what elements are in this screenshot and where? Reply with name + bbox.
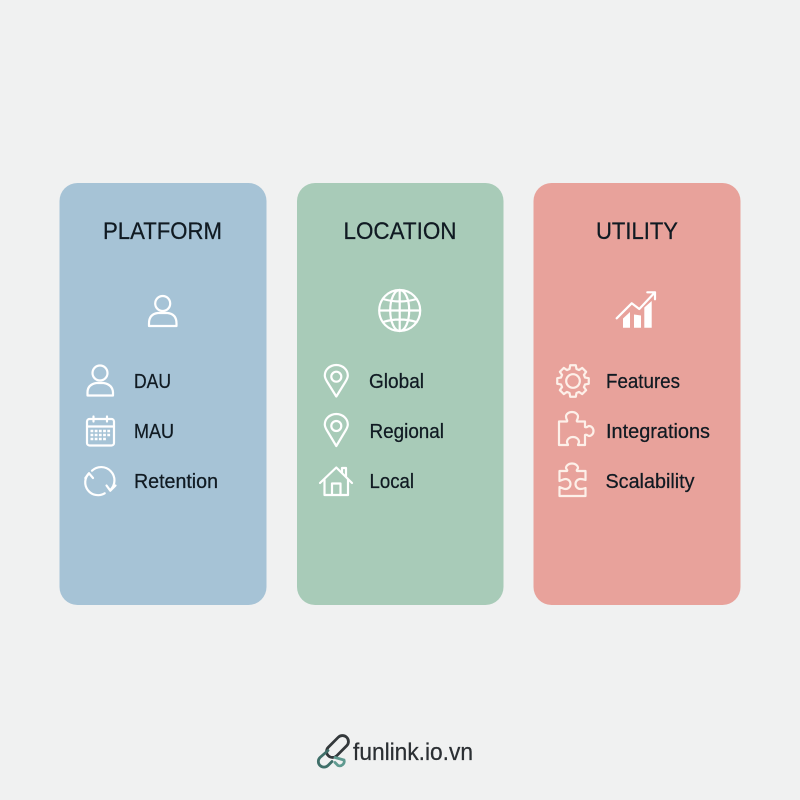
icon: refresh arrows — [85, 467, 116, 495]
item: Scalability — [560, 464, 694, 496]
footer brand — [318, 733, 473, 767]
label: MAU: MAU — [134, 421, 174, 443]
icon: gear — [557, 365, 589, 397]
panel: utility — [534, 183, 740, 605]
icon: calendar — [87, 416, 114, 446]
item: MAU — [87, 416, 174, 446]
label: Local: Local — [370, 471, 414, 493]
label: Scalability: Scalability — [606, 471, 694, 493]
item: Features — [557, 365, 680, 397]
label: Global: Global — [369, 371, 424, 393]
heading: location: LOCATION — [344, 218, 456, 245]
label: Regional: Regional — [370, 421, 444, 443]
icon: growth chart — [617, 292, 655, 328]
icon: map pin — [325, 414, 348, 446]
item: Retention — [85, 467, 218, 495]
panel: platform — [60, 183, 266, 605]
icon: puzzle piece — [560, 464, 586, 496]
heading: utility: UTILITY — [596, 218, 678, 245]
item: Global — [325, 365, 424, 396]
icon: platform user — [149, 296, 176, 326]
item: Integrations — [559, 412, 710, 445]
brand name: funlink.io.vn — [353, 739, 473, 766]
label: Retention: Retention — [134, 471, 218, 493]
label: Features: Features — [606, 371, 680, 393]
heading: platform: PLATFORM — [103, 218, 222, 245]
icon: globe — [379, 290, 420, 331]
label: DAU: DAU — [134, 371, 171, 393]
item: DAU — [88, 366, 171, 396]
icon: chain link — [318, 733, 351, 767]
panel: location — [297, 183, 504, 605]
icon: house — [320, 468, 352, 495]
label: Integrations: Integrations — [606, 421, 710, 443]
icon: map pin — [325, 365, 348, 396]
icon: puzzle piece — [559, 412, 594, 445]
item: Regional — [325, 414, 444, 446]
icon: user — [88, 366, 113, 396]
item: Local — [320, 468, 414, 495]
